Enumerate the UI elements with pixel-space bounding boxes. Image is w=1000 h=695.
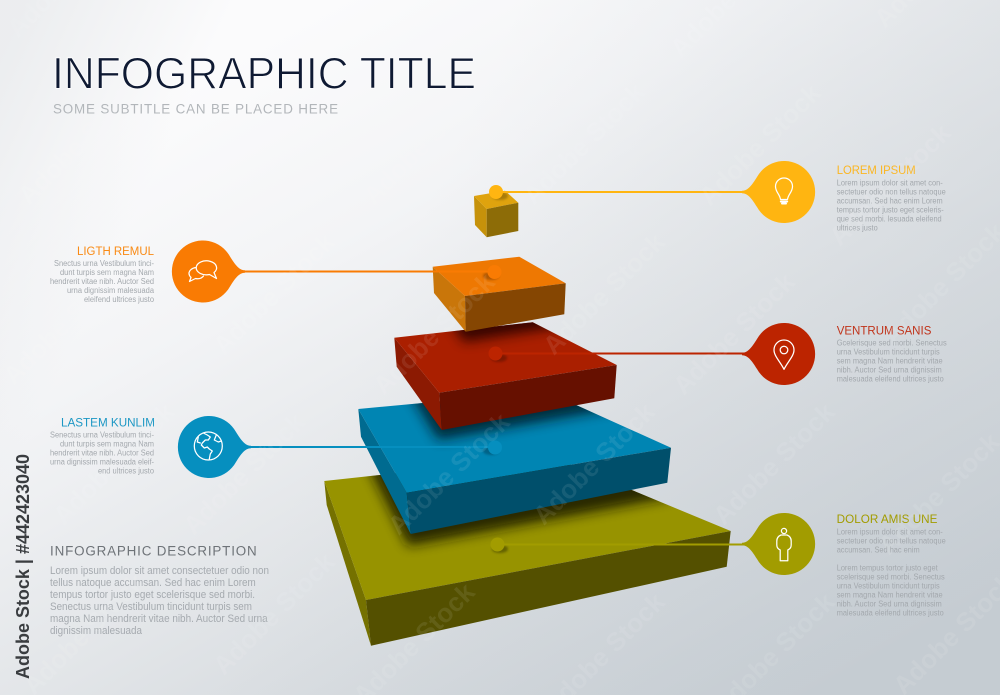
text block: Dolor Amis Une: nibh. Auctor Sed urna dignissim: [837, 600, 942, 609]
text block: Lastem Kunlim: end ultrices justo: [98, 466, 155, 476]
pin: yellow with light bulb icon: [742, 161, 815, 223]
text block: Lastem Kunlim: LASTEM KUNLIM: [61, 418, 155, 430]
text block: Lorem Ipsum: que sed morbi. lesuada eleifend: [837, 214, 942, 223]
text block: Dolor Amis Une: Lorem tempus tortor justo eget: [837, 564, 938, 573]
stock watermarks: Adobe Stock: [0, 256, 131, 390]
text block: Infographic Description: [50, 544, 269, 637]
stock watermarks: Adobe Stock: [707, 396, 841, 530]
stock watermarks: Adobe Stock: [207, 226, 341, 360]
connector: red: [488, 346, 750, 362]
layer 5: olive base block: [324, 464, 731, 646]
stock watermarks: Adobe Stock: [537, 226, 671, 360]
text block: Dolor Amis Une: malesuada eleifend ultrices justo: [837, 609, 944, 618]
text block: Lastem Kunlim: hendrerit vitae nibh. Auctor Sed: [50, 448, 154, 458]
stock watermarks: Adobe Stock: [823, 117, 957, 251]
connector: blue: [245, 440, 502, 455]
text block: Lastem Kunlim: dunt turpis sem magna Nam: [60, 440, 154, 448]
text block: Lorem Ipsum: [837, 165, 946, 232]
connector: olive: [490, 538, 750, 553]
text block: Infographic Description: Lorem ipsum dolor sit amet consectetuer odio non: [50, 565, 269, 577]
stock watermarks: Adobe Stock: [517, 76, 651, 210]
text block: Lastem Kunlim: Senectus urna Vestibulum tinci-: [50, 430, 154, 440]
text block: Infographic Description: tempus tortor justo eget scelerisque sed morbi.: [50, 589, 255, 601]
stock watermarks: Adobe Stock: [527, 396, 661, 530]
connector: yellow: [489, 185, 750, 200]
layer 1: yellow cube: [474, 191, 518, 237]
text block: Ventrum Sanis: VENTRUM SANIS: [837, 325, 932, 337]
title: INFOGRAPHIC TITLE: [52, 50, 476, 99]
text block: Ligth Remul: LIGTH REMUL: [77, 246, 155, 258]
text block: Ventrum Sanis: urna Vestibulum tincidunt turpis: [837, 348, 940, 357]
text block: Infographic Description: INFOGRAPHIC DESCRIPTION: [50, 544, 257, 559]
stock watermarks: Adobe Stock: [357, 76, 491, 210]
pin: orange with speech bubbles icon: [172, 240, 245, 302]
text block: Dolor Amis Une: Lorem ipsum dolor sit amet con-: [837, 527, 943, 536]
icon: map marker: [774, 340, 794, 369]
stock watermarks: Adobe Stock: [12, 76, 146, 210]
text block: Ligth Remul: urna dignissim malesuada: [67, 286, 155, 295]
text block: Infographic Description: dignissim malesuada: [50, 625, 142, 637]
text block: Lorem Ipsum: Lorem ipsum dolor sit amet con-: [837, 178, 943, 187]
text block: Ventrum Sanis: malesuada eleifend ultrices justo: [837, 375, 944, 384]
text block: Infographic Description: magna Nam hendrerit vitae nibh. Auctor Sed urna: [50, 613, 268, 625]
stock watermarks: Adobe Stock: [382, 406, 516, 540]
text block: Ligth Remul: eleifend ultrices justo: [84, 295, 155, 304]
text block: Ventrum Sanis: Gcelerisque sed morbi. Senectus: [837, 339, 947, 348]
icon: speech bubbles: [189, 261, 217, 282]
text block: Ligth Remul: dunt turpis sem magna Nam: [60, 268, 154, 277]
text block: Lorem Ipsum: accumsan. Sed hac enim Lorem: [837, 196, 943, 205]
stock watermarks: Adobe Stock: [177, 406, 311, 540]
text block: Dolor Amis Une: sem magna Nam hendrerit vitae: [837, 591, 943, 600]
stock watermarks: Adobe Stock: [693, 77, 827, 211]
text block: Ventrum Sanis: sem magna Nam hendrerit vitae: [837, 357, 943, 366]
layer 4: blue block: [358, 401, 671, 534]
stock watermarks: Adobe Stock: [667, 266, 801, 400]
stock watermarks: Adobe Stock: [367, 266, 501, 400]
layered pyramid chart: [324, 191, 731, 646]
text block: Ventrum Sanis: [837, 325, 947, 384]
icon: globe: [194, 432, 222, 460]
text block: Dolor Amis Une: accumsan. Sed hac enim: [837, 545, 920, 554]
icon: person: [777, 528, 791, 561]
text block: Ligth Remul: [50, 246, 155, 304]
pin: olive with person icon: [742, 513, 815, 575]
text block: Ligth Remul: hendrerit vitae nibh. Auctor Sed: [50, 277, 154, 286]
text block: Ventrum Sanis: nibh. Auctor Sed urna dignissim: [837, 366, 942, 375]
text block: Dolor Amis Une: urna Vestibulum tincidunt turpis: [837, 582, 940, 591]
text block: Lastem Kunlim: urna dignissim malesuada eleif-: [50, 458, 154, 466]
text block: Ligth Remul: Snectus urna Vestibulum tinci-: [54, 259, 154, 268]
text block: Lorem Ipsum: LOREM IPSUM: [837, 165, 916, 177]
text block: Lorem Ipsum: ultrices justo: [837, 223, 878, 232]
vertical stock credit: Adobe Stock | #442423040: [13, 454, 33, 679]
text block: Dolor Amis Une: [837, 514, 946, 618]
subtitle: SOME SUBTITLE CAN BE PLACED HERE: [53, 102, 338, 116]
text block: Dolor Amis Une: sectetuer odio non tellus natoque: [837, 536, 946, 545]
pin: blue with globe icon: [178, 416, 251, 478]
stock watermarks: Adobe Stock: [167, 106, 301, 240]
stock watermarks: Adobe Stock: [207, 546, 341, 680]
text block: Lorem Ipsum: tempus tortor justo eget sceleris-: [837, 205, 944, 214]
stock watermarks: Adobe Stock: [47, 396, 181, 530]
text block: Dolor Amis Une: scelerisque sed morbi. Senectus: [837, 573, 945, 582]
connector: orange: [240, 265, 502, 280]
text block: Lorem Ipsum: sectetuer odio non tellus natoque: [837, 187, 946, 196]
text block: Infographic Description: tellus natoque accumsan. Sed hac enim Lorem: [50, 577, 256, 589]
text block: Infographic Description: Senectus urna Vestibulum tincidunt turpis sem: [50, 601, 252, 613]
layer 3: red block: [394, 322, 617, 430]
text block: Dolor Amis Une: DOLOR AMIS UNE: [837, 514, 938, 526]
layer 2: orange block: [433, 257, 566, 332]
pin: red with map marker icon: [742, 323, 815, 385]
text block: Lastem Kunlim: [50, 418, 155, 476]
icon: light bulb: [776, 178, 792, 204]
